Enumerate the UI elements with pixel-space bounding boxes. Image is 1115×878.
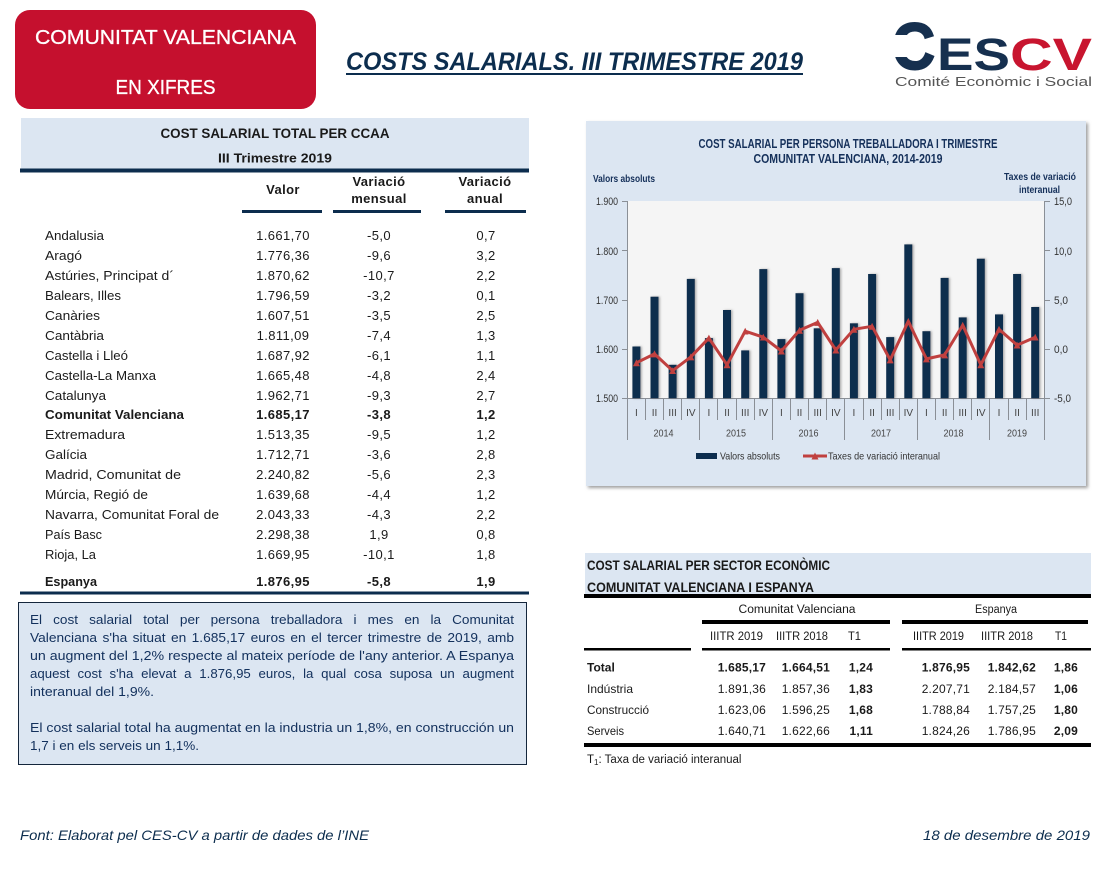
quarter labels: I bbox=[853, 408, 855, 419]
table rows: 1.712,71 bbox=[256, 447, 310, 462]
sector table heading: COST SALARIAL PER SECTOR ECONÒMIC bbox=[587, 558, 830, 573]
badge: Comunitat Valenciana en xifres bbox=[15, 10, 316, 109]
chart title: COMUNITAT VALENCIANA, 2014-2019 bbox=[754, 152, 943, 166]
text block: commentary: El cost salarial total ha augmentat en la industria un 1,8%, en construcción un bbox=[30, 720, 514, 735]
sector table rows: 1,68 bbox=[849, 703, 873, 717]
quarter labels: IV bbox=[904, 408, 913, 419]
logo: CES CV bbox=[885, 9, 1092, 89]
quarter labels: IV bbox=[976, 408, 986, 419]
table rows: -9,6 bbox=[367, 248, 391, 263]
date: 18 de desembre de 2019 bbox=[923, 827, 1090, 843]
quarter labels: II bbox=[1014, 408, 1020, 419]
left axis labels: 1.800 bbox=[596, 246, 618, 258]
sector table column headers: Comunitat Valenciana bbox=[738, 604, 856, 616]
sector table rows: 1,11 bbox=[850, 724, 873, 738]
year labels: 2015 bbox=[726, 428, 746, 440]
sector table column headers: IIITR 2018 bbox=[981, 631, 1033, 643]
table heading: III Trimestre 2019 bbox=[218, 150, 332, 166]
table rows: 1.687,92 bbox=[256, 348, 310, 363]
quarter labels: IV bbox=[831, 408, 841, 419]
table rows: 2,2 bbox=[476, 507, 496, 522]
table rows: 1.639,68 bbox=[256, 487, 310, 502]
year labels: 2019 bbox=[1007, 428, 1027, 440]
plot background bbox=[627, 201, 1044, 398]
table rows: 2.240,82 bbox=[256, 467, 310, 482]
sector table rows: 1,24 bbox=[849, 660, 873, 674]
table rows: 2,8 bbox=[476, 447, 496, 462]
sector table rows: 1,06 bbox=[1054, 682, 1078, 696]
right axis labels: 15,0 bbox=[1054, 196, 1072, 208]
quarter labels: III bbox=[668, 408, 677, 419]
table rows: 2,3 bbox=[476, 467, 496, 482]
table rows: Aragó bbox=[45, 248, 82, 263]
sector table rows: 1,86 bbox=[1054, 660, 1078, 674]
table rows: 1,9 bbox=[369, 527, 389, 542]
table total row: Espanya bbox=[20, 574, 529, 594]
sector table rows: 2,09 bbox=[1054, 724, 1078, 738]
table rows: 1.661,70 bbox=[256, 228, 310, 243]
legend bbox=[696, 450, 940, 462]
sector table column headers: Espanya bbox=[975, 604, 1018, 616]
axes bbox=[622, 201, 1050, 440]
right axis labels: 5,0 bbox=[1054, 295, 1068, 307]
table total row: Espanya: 1.876,95 bbox=[256, 574, 310, 589]
table rows: -4,3 bbox=[367, 507, 391, 522]
right axis labels: -5,0 bbox=[1054, 393, 1071, 405]
quarter labels: IV bbox=[759, 408, 768, 419]
table rows: 0,7 bbox=[476, 228, 496, 243]
table rows: 1,3 bbox=[476, 328, 496, 343]
table rows: 0,8 bbox=[476, 527, 496, 542]
table heading bbox=[20, 118, 529, 172]
sector table rows: 1.891,36 bbox=[718, 682, 766, 696]
text block: commentary: un augment del 1,2% respecte al mateix període de l'any anterior. A Espanya bbox=[30, 648, 515, 663]
bars: valors absoluts bbox=[632, 244, 1039, 398]
quarter labels bbox=[635, 408, 1039, 419]
sector table rows: 1.623,06 bbox=[718, 703, 766, 717]
sector table rows: 1.622,66 bbox=[782, 724, 830, 738]
right axis labels: 0,0 bbox=[1054, 344, 1068, 356]
table rows: Catalunya bbox=[45, 388, 107, 403]
logo: CES CV: CV bbox=[1010, 29, 1092, 80]
table rows: 1.776,36 bbox=[256, 248, 310, 263]
table rows: -5,0 bbox=[367, 228, 391, 243]
table rows: -10,1 bbox=[363, 547, 395, 562]
table rows: 2.043,33 bbox=[256, 507, 310, 522]
line: taxes de variació interanual bbox=[636, 321, 1035, 371]
sector table rows: 1.685,17 bbox=[718, 660, 766, 674]
text block: commentary: 1,7 i en els serveis un 1,1%. bbox=[30, 738, 199, 753]
sector table column headers: T1 bbox=[1055, 631, 1067, 643]
sector table rows: 2.184,57 bbox=[988, 682, 1036, 696]
sector table rows: Indústria bbox=[587, 682, 633, 696]
table rows: 1.870,62 bbox=[256, 268, 310, 283]
table rows: -10,7 bbox=[363, 268, 395, 283]
table rows: 2,7 bbox=[476, 388, 496, 403]
table rows: 2,4 bbox=[476, 368, 496, 383]
sector table rows bbox=[584, 660, 1091, 747]
table total row: Espanya: 1,9 bbox=[476, 574, 496, 589]
table rows: 1.796,59 bbox=[256, 288, 310, 303]
text block: commentary: El cost salarial total per persona treballadora i mes en la Comunitat bbox=[30, 612, 514, 627]
year labels bbox=[654, 428, 1027, 440]
logo: CES CV: ES bbox=[937, 29, 1010, 80]
table rows: -3,6 bbox=[367, 447, 391, 462]
table total row: Espanya: Espanya bbox=[45, 574, 98, 589]
quarter labels: III bbox=[959, 408, 967, 419]
table rows: 2.298,38 bbox=[256, 527, 310, 542]
table rows: Andalusia bbox=[45, 228, 105, 243]
table rows: 2,5 bbox=[476, 308, 496, 323]
table rows: Castella i Lleó bbox=[45, 348, 128, 363]
chart title bbox=[698, 137, 998, 166]
quarter labels: III bbox=[814, 408, 822, 419]
table rows: 1.685,17 bbox=[256, 407, 310, 422]
table rows: Canàries bbox=[45, 308, 101, 323]
table rows: Comunitat Valenciana bbox=[45, 407, 185, 422]
right axis title bbox=[1004, 171, 1076, 196]
quarter labels: II bbox=[869, 408, 875, 419]
logo: CES CV: C bbox=[892, 9, 935, 83]
quarter labels: I bbox=[708, 408, 710, 419]
text block: commentary: interanual del 1,9%. bbox=[30, 684, 154, 699]
table rows: 2,2 bbox=[476, 268, 496, 283]
sector table column headers: IIITR 2018 bbox=[776, 631, 828, 643]
quarter labels: III bbox=[1031, 408, 1039, 419]
table rows: 1,8 bbox=[476, 547, 496, 562]
table rows: 1,2 bbox=[476, 427, 496, 442]
table rows: 1.811,09 bbox=[257, 328, 309, 343]
table rows: -9,3 bbox=[367, 388, 391, 403]
table rows: Galícia bbox=[45, 447, 88, 462]
sector table rows: Total bbox=[587, 660, 615, 674]
table rows: -9,5 bbox=[367, 427, 391, 442]
quarter labels: II bbox=[652, 408, 657, 419]
table rows: -4,8 bbox=[367, 368, 391, 383]
sector table column headers: T1 bbox=[848, 631, 861, 643]
table rows: 1,2 bbox=[476, 487, 496, 502]
sector table rows: 1.596,25 bbox=[782, 703, 830, 717]
sector table rows: 1.640,71 bbox=[718, 724, 766, 738]
badge: Comunitat Valenciana en xifres: EN XIFRES bbox=[116, 77, 216, 99]
quarter labels: II bbox=[724, 408, 730, 419]
quarter labels: II bbox=[797, 408, 802, 419]
text block: commentary bbox=[18, 602, 526, 764]
right axis title: interanual bbox=[1019, 184, 1060, 196]
sector table rows: 1.857,36 bbox=[782, 682, 830, 696]
left axis labels: 1.600 bbox=[596, 344, 618, 356]
table rows: 1,2 bbox=[476, 407, 496, 422]
table rows: Madrid, Comunitat de bbox=[45, 467, 181, 482]
table column headers: Variació bbox=[352, 174, 406, 189]
footnote: 1 bbox=[594, 758, 599, 767]
right axis labels: 10,0 bbox=[1054, 246, 1072, 258]
footnote: T bbox=[587, 754, 594, 766]
sector table rows: 1,80 bbox=[1054, 703, 1078, 717]
sector table column headers: IIITR 2019 bbox=[913, 631, 964, 643]
quarter labels: II bbox=[942, 408, 947, 419]
quarter labels: I bbox=[635, 408, 638, 419]
table rows: Rioja, La bbox=[45, 547, 97, 562]
sector table rows: 1.664,51 bbox=[782, 660, 830, 674]
table rows: 1.513,35 bbox=[256, 427, 310, 442]
sector table column headers: IIITR 2019 bbox=[710, 631, 763, 643]
table heading: COST SALARIAL TOTAL PER CCAA bbox=[160, 125, 390, 141]
table rows: Extremadura bbox=[45, 427, 126, 442]
table rows: -3,5 bbox=[367, 308, 391, 323]
sector table rows: Serveis bbox=[587, 724, 624, 738]
title: COSTS SALARIALS. III TRIMESTRE 2019 bbox=[346, 48, 803, 76]
quarter labels: IV bbox=[686, 408, 696, 419]
table rows: 1.669,95 bbox=[256, 547, 310, 562]
table rows: Cantàbria bbox=[45, 328, 105, 343]
quarter labels: III bbox=[741, 408, 749, 419]
sector table rows: 2.207,71 bbox=[922, 682, 970, 696]
table rows: Castella-La Manxa bbox=[45, 368, 157, 383]
quarter labels: I bbox=[780, 408, 783, 419]
text block: commentary: Valenciana s'ha situat en 1.685,17 euros en el tercer trimestre de 2019, amb bbox=[30, 630, 514, 645]
year labels: 2018 bbox=[944, 428, 964, 440]
left axis labels: 1.900 bbox=[596, 196, 618, 208]
table column headers: mensual bbox=[351, 191, 407, 206]
table rows: 1.665,48 bbox=[256, 368, 310, 383]
quarter labels: I bbox=[925, 408, 928, 419]
table rows: -5,6 bbox=[367, 467, 391, 482]
sector table rows: 1.788,84 bbox=[922, 703, 970, 717]
table rows: -6,1 bbox=[367, 348, 391, 363]
text block: commentary: aquest cost s'ha elevat a 1.876,95 euros, la qual cosa suposa un augment bbox=[30, 666, 514, 681]
table rows: 1.607,51 bbox=[256, 308, 310, 323]
sector table heading bbox=[584, 553, 1091, 598]
legend: Valors absoluts bbox=[720, 450, 780, 462]
sector table heading: COMUNITAT VALENCIANA I ESPANYA bbox=[587, 580, 814, 595]
table rows: -7,4 bbox=[367, 328, 391, 343]
table rows: 1.962,71 bbox=[256, 388, 310, 403]
sector table rows: 1,83 bbox=[849, 682, 873, 696]
table column headers bbox=[242, 174, 526, 213]
left axis labels bbox=[596, 196, 618, 405]
sector table rows: Construcció bbox=[587, 703, 649, 717]
left axis labels: 1.700 bbox=[596, 295, 618, 307]
right axis title: Taxes de variació bbox=[1004, 171, 1076, 183]
source note: Font: Elaborat pel CES-CV a partir de dades de l’INE bbox=[20, 827, 370, 843]
table rows: País Basc bbox=[45, 527, 102, 542]
table rows: Múrcia, Regió de bbox=[45, 487, 148, 502]
year labels: 2014 bbox=[654, 428, 674, 440]
sector table rows: 1.824,26 bbox=[922, 724, 970, 738]
table rows: Navarra, Comunitat Foral de bbox=[45, 507, 219, 522]
year labels: 2016 bbox=[798, 428, 819, 440]
quarter labels: I bbox=[998, 408, 1000, 419]
left axis title: Valors absoluts bbox=[593, 173, 655, 185]
year labels: 2017 bbox=[871, 428, 891, 440]
table column headers: Valor bbox=[266, 182, 300, 197]
table rows: -3,8 bbox=[367, 407, 391, 422]
panel: chart cost salarial per persona treballadora bbox=[586, 121, 1086, 486]
badge: Comunitat Valenciana en xifres: COMUNITAT VALENCIANA bbox=[35, 27, 297, 49]
table rows: 0,1 bbox=[476, 288, 496, 303]
table column headers: Variació bbox=[458, 174, 512, 189]
right axis labels bbox=[1054, 196, 1072, 405]
logo: CES CV: Comité Econòmic i Social bbox=[895, 74, 1092, 89]
legend: Taxes de variació interanual bbox=[828, 450, 940, 462]
sector table column headers bbox=[584, 604, 1091, 650]
footnote: : Taxa de variació interanual bbox=[598, 754, 741, 766]
table rows bbox=[45, 228, 496, 562]
table total row: Espanya: -5,8 bbox=[367, 574, 391, 589]
sector table rows: 1.786,95 bbox=[988, 724, 1036, 738]
table rows: 1,1 bbox=[476, 348, 496, 363]
sector table rows: 1.842,62 bbox=[988, 660, 1036, 674]
table rows: -3,2 bbox=[367, 288, 391, 303]
quarter labels: III bbox=[886, 408, 894, 419]
table rows: Balears, Illes bbox=[45, 288, 122, 303]
sector table rows: 1.876,95 bbox=[922, 660, 970, 674]
panel: cost salarial per sector econòmic table bbox=[584, 553, 1091, 767]
chart title: COST SALARIAL PER PERSONA TREBALLADORA I TRIMESTRE bbox=[698, 137, 998, 151]
left axis labels: 1.500 bbox=[596, 393, 618, 405]
sector table rows: 1.757,25 bbox=[988, 703, 1036, 717]
table column headers: anual bbox=[467, 191, 503, 206]
table rows: Astúries, Principat d´ bbox=[45, 268, 174, 283]
panel: cost salarial total per CCAA table bbox=[20, 118, 529, 594]
table rows: 3,2 bbox=[476, 248, 496, 263]
table rows: -4,4 bbox=[367, 487, 391, 502]
